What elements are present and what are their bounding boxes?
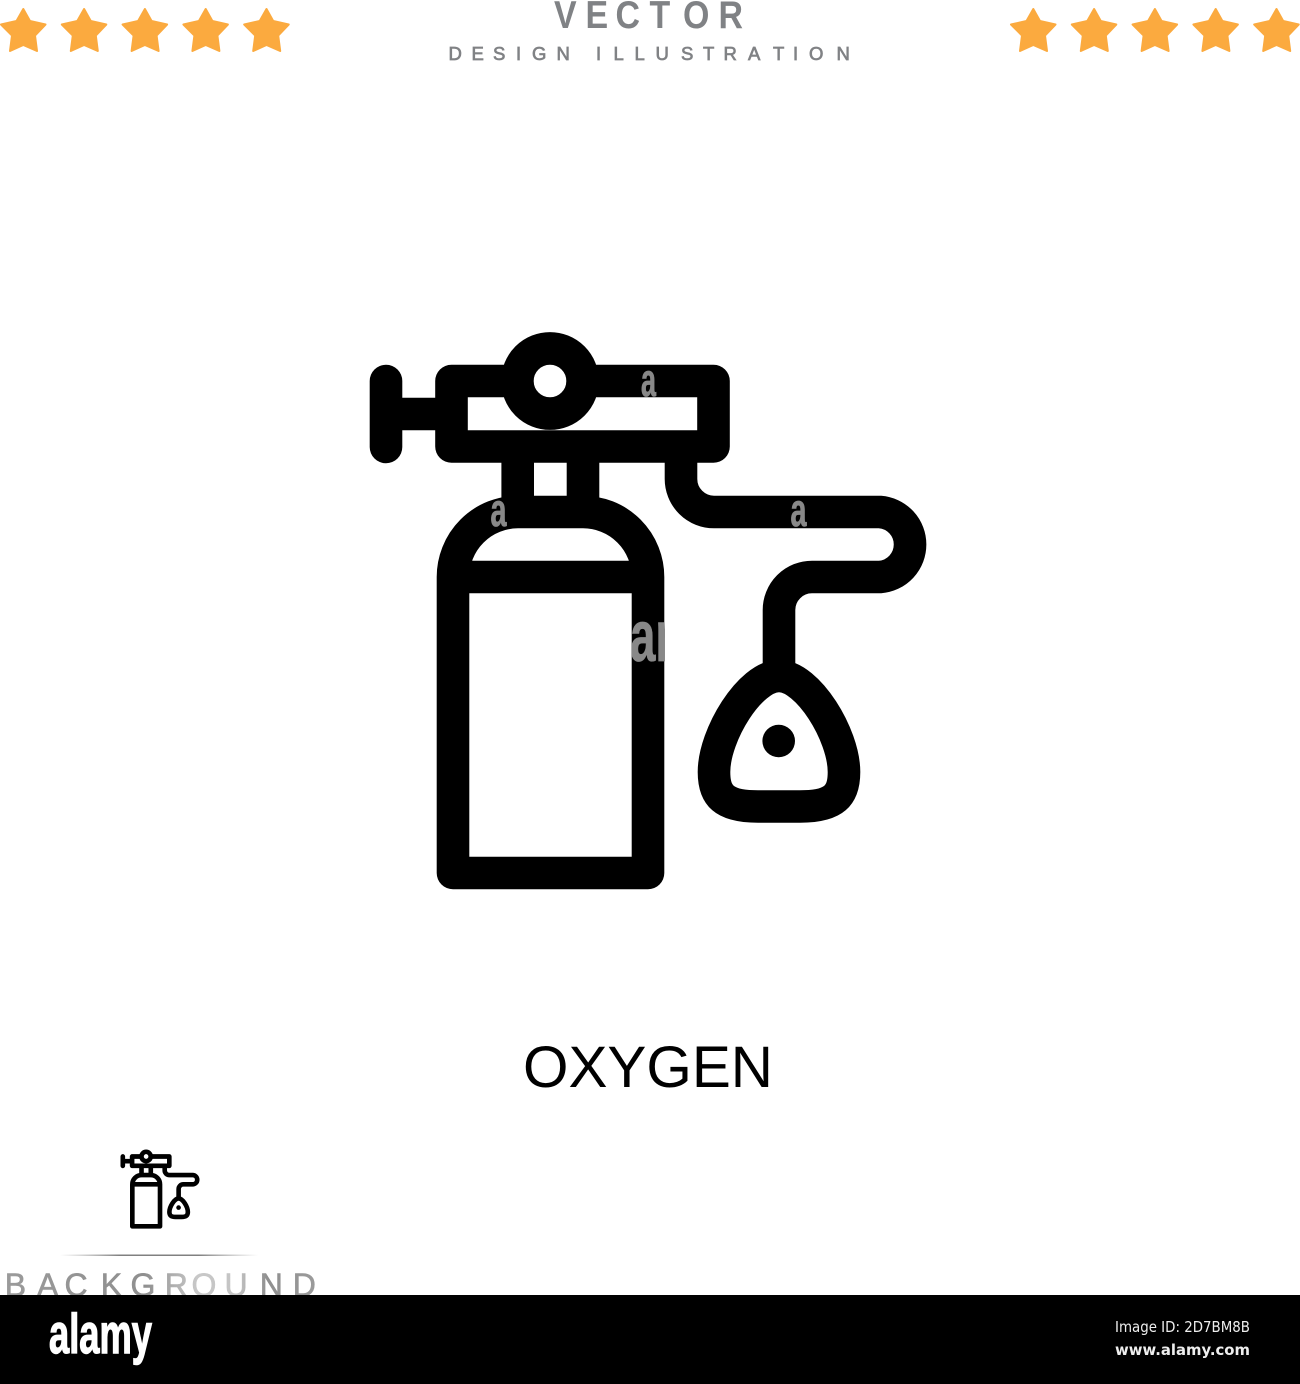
image id: Image ID: 2D7BM8B [1115, 1318, 1250, 1336]
left rating stars [1, 9, 289, 51]
divider line [60, 1254, 258, 1256]
logo: alamy: alamy [49, 1302, 152, 1365]
mask [714, 676, 844, 806]
icon: oxygen cylinder with mask [386, 348, 910, 873]
valve handle [370, 381, 402, 447]
watermark letters on icon: am [630, 597, 696, 677]
valve stem [386, 398, 445, 430]
regulator body [452, 381, 714, 446]
cylinder neck [518, 446, 583, 512]
subheading: DESIGN ILLUSTRATION: DESIGN ILLUSTRATION [448, 43, 850, 64]
label: BACKGROUND: BACKGROUND [5, 1267, 316, 1303]
website: www.alamy.com [1115, 1341, 1250, 1359]
icon: small oxygen cylinder [123, 1152, 197, 1226]
footer bar [0, 1295, 1300, 1384]
watermark letters on icon: a [641, 354, 656, 406]
watermark letters on icon: a [790, 484, 807, 536]
regulator gauge [517, 348, 583, 414]
cylinder body [453, 512, 648, 873]
footer background [0, 1295, 1300, 1384]
watermark letters on icon: a [490, 484, 507, 536]
mask opening [762, 725, 795, 757]
label: OXYGEN: OXYGEN [523, 1035, 773, 1100]
right rating stars [1011, 9, 1299, 51]
watermark letters on icon [490, 354, 807, 677]
hose [681, 446, 910, 672]
